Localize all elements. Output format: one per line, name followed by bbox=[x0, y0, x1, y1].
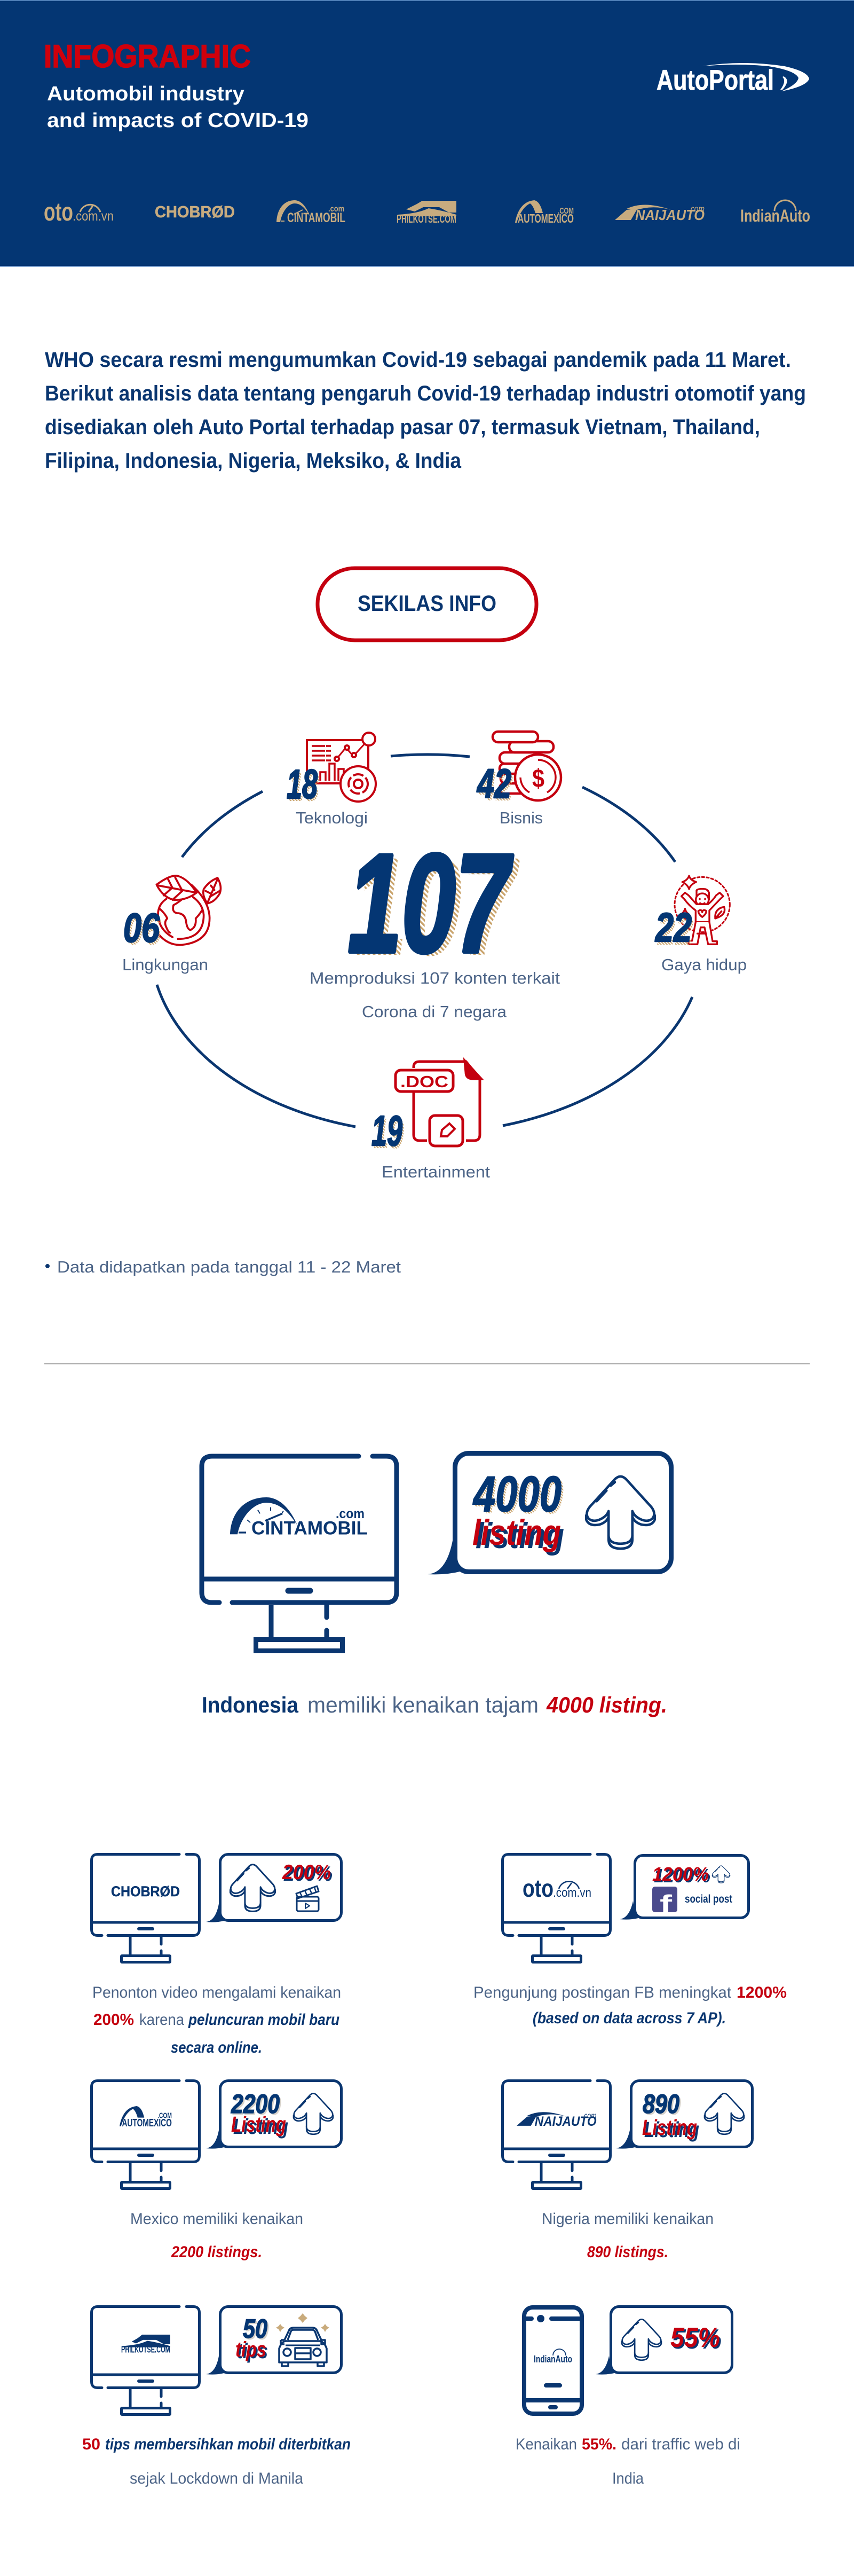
icon: phone bbox=[524, 2307, 582, 2414]
caption: Nigeria memiliki kenaikan bbox=[542, 2210, 714, 2228]
caption bbox=[542, 2210, 714, 2261]
speech bubble bbox=[206, 2080, 342, 2149]
panel: Philkotse tips bbox=[82, 2307, 351, 2487]
speech bubble bbox=[620, 1855, 748, 1920]
caption: 4000 listing. bbox=[546, 1692, 667, 1717]
stat: 50 tips: tips bbox=[235, 2338, 266, 2361]
caption: dari traffic web di bbox=[621, 2436, 740, 2453]
number: 22: 22 bbox=[657, 908, 693, 954]
caption: Kenaikan bbox=[516, 2436, 577, 2453]
panel: Chobrod video viewers bbox=[92, 1854, 342, 2056]
icon: small up arrow bbox=[712, 1866, 730, 1883]
caption: 2200 listings. bbox=[171, 2243, 262, 2261]
caption: Mexico memiliki kenaikan bbox=[130, 2210, 303, 2228]
logo: cintamobil bbox=[230, 1497, 368, 1539]
stat: 4000 listing: listing bbox=[476, 1515, 564, 1556]
icon: facebook: f bbox=[660, 1890, 673, 1918]
central figure: 107: 107 bbox=[353, 828, 521, 985]
caption: memiliki kenaikan tajam bbox=[307, 1692, 539, 1717]
stat: 50 tips: tips bbox=[237, 2339, 268, 2363]
logo: naijauto bbox=[517, 2111, 597, 2129]
header banner bbox=[0, 0, 854, 267]
logo: NAIJAUTO bbox=[615, 205, 705, 223]
stat: 1200%: 1200% bbox=[654, 1865, 710, 1887]
topic: Entertainment bbox=[371, 1061, 490, 1181]
subtitle: Automobil industry bbox=[47, 83, 244, 105]
caption bbox=[130, 2210, 303, 2261]
logo: naijauto: NAIJAUTO bbox=[535, 2114, 597, 2129]
icon: up arrow bbox=[294, 2093, 333, 2134]
caption: 1200% bbox=[737, 1984, 787, 2001]
icon: document: .DOC bbox=[400, 1072, 448, 1091]
stat: 1200%: 1200% bbox=[652, 1863, 709, 1885]
logo: oto.com.vn: .com.vn bbox=[73, 209, 114, 224]
speech bubble bbox=[616, 2080, 753, 2149]
logo: AUTOMEXICO: .COM bbox=[558, 207, 574, 216]
stat: 4000 listing: 4000 bbox=[472, 1466, 562, 1522]
label: Bisnis bbox=[500, 808, 543, 827]
topic: Bisnis bbox=[477, 732, 561, 827]
caption: Pengunjung postingan FB meningkat bbox=[473, 1984, 732, 2001]
stat: 50 tips: 50 bbox=[243, 2314, 267, 2344]
logo: philkotse bbox=[121, 2335, 170, 2355]
heading: INFOGRAPHIC: INFOGRAPHIC bbox=[44, 38, 251, 74]
button: SEKILAS INFO: SEKILAS INFO bbox=[358, 591, 496, 616]
caption bbox=[516, 2436, 740, 2487]
logo: cintamobil: CINTAMOBIL bbox=[251, 1518, 368, 1539]
logo: IndianAuto bbox=[740, 200, 810, 225]
stat: 890 Listing: 890 bbox=[643, 2089, 679, 2119]
topic: Teknologi bbox=[287, 733, 376, 827]
caption: peluncuran mobil baru bbox=[188, 2011, 339, 2029]
speech bubble bbox=[428, 1454, 671, 1574]
logo: AUTOMEXICO: AUTOMEXICO bbox=[518, 211, 574, 225]
logo: indianauto: IndianAuto bbox=[534, 2354, 572, 2365]
speech bubble bbox=[206, 1854, 342, 1922]
logo: cintamobil: .com bbox=[336, 1506, 365, 1521]
stat: 2200 Listing: 2200 bbox=[232, 2091, 281, 2121]
caption: 55%. bbox=[582, 2436, 616, 2453]
central caption: Corona di 7 negara bbox=[362, 1002, 507, 1021]
label: Teknologi bbox=[296, 808, 368, 827]
logo: AutoPortal: AutoPortal bbox=[657, 65, 774, 96]
logo: AUTOMEXICO bbox=[515, 200, 574, 225]
stat: 200%: 200% bbox=[283, 1863, 333, 1886]
intro text: WHO secara resmi mengumumkan Covid-19 sebagai pandemik pada 11 Maret. bbox=[45, 348, 791, 372]
topic: Teknologi: 18 bbox=[287, 761, 318, 807]
logo: oto.com.vn: oto bbox=[523, 1874, 553, 1902]
logo: NAIJAUTO: .com bbox=[689, 205, 705, 214]
stat: 890 Listing: Listing bbox=[644, 2117, 699, 2142]
topic: Bisnis: 42 bbox=[477, 761, 511, 807]
logo: automexico: AUTOMEXICO bbox=[122, 2117, 172, 2129]
stat: 4000 listing: 4000 bbox=[475, 1468, 564, 1524]
caption bbox=[82, 2436, 351, 2487]
icon: up arrow bbox=[705, 2093, 744, 2134]
logo: NAIJAUTO: NAIJAUTO bbox=[635, 207, 705, 223]
logo: oto.com.vn bbox=[523, 1874, 591, 1902]
stat: 890 Listing bbox=[642, 2089, 699, 2142]
logo: PHILKOTSE bbox=[397, 201, 456, 225]
stat: 200%: 200% bbox=[282, 1861, 331, 1884]
logo: CHOBROD: CHOBRØD bbox=[155, 202, 235, 221]
icon: document bbox=[396, 1061, 481, 1146]
caption bbox=[473, 1984, 787, 2027]
monitor bbox=[202, 1456, 397, 1651]
logo: automexico bbox=[120, 2106, 172, 2129]
monitor bbox=[503, 1854, 611, 1962]
caption: secara online. bbox=[171, 2039, 262, 2056]
stat: 55%: 55% bbox=[670, 2322, 720, 2353]
topic: Gaya hidup: 22 bbox=[654, 905, 692, 951]
monitor bbox=[92, 2307, 200, 2415]
stat: 890 Listing: Listing bbox=[642, 2115, 697, 2140]
speech bubble bbox=[206, 2307, 342, 2375]
monitor bbox=[503, 2080, 611, 2188]
icon: clapperboard bbox=[296, 1886, 319, 1911]
number: 06: 06 bbox=[125, 908, 162, 954]
logo: automexico: .COM bbox=[157, 2111, 172, 2121]
icon: up arrow bbox=[586, 1477, 655, 1549]
stat: 50 tips: 50 bbox=[244, 2315, 269, 2345]
icon: chart board bbox=[307, 733, 376, 802]
caption: tips membersihkan mobil diterbitkan bbox=[105, 2436, 351, 2453]
icon: facebook bbox=[652, 1887, 677, 1918]
panel: Indonesia hero bbox=[202, 1454, 671, 1717]
central caption bbox=[310, 969, 560, 1021]
stat: 2200 Listing: 2200 bbox=[231, 2089, 280, 2119]
number: 18: 18 bbox=[289, 764, 319, 810]
topic: Entertainment: 19 bbox=[371, 1107, 402, 1155]
caption: sejak Lockdown di Manila bbox=[130, 2470, 303, 2487]
logo: CINTAMOBIL: .com bbox=[328, 205, 344, 214]
icon: sparkles bbox=[276, 2313, 329, 2332]
topic: Lingkungan: 06 bbox=[123, 906, 160, 951]
panel: oto.com.vn Facebook visitors bbox=[473, 1854, 787, 2027]
stat: 2200 Listing: Listing bbox=[233, 2114, 288, 2139]
intro text bbox=[45, 348, 806, 473]
intro text: disediakan oleh Auto Portal terhadap pasar 07, termasuk Vietnam, Thailand, bbox=[45, 415, 760, 439]
monitor bbox=[92, 1854, 200, 1962]
caption: 200% bbox=[93, 2011, 134, 2029]
caption bbox=[202, 1692, 667, 1717]
caption: (based on data across 7 AP). bbox=[533, 2009, 726, 2027]
ellipse ring of arcs bbox=[157, 755, 692, 1127]
logo: chobrod: CHOBRØD bbox=[111, 1883, 180, 1899]
icon: globe with leaves bbox=[156, 876, 220, 945]
logo: oto.com.vn: .com.vn bbox=[553, 1886, 591, 1899]
icon: up arrow bbox=[622, 2319, 661, 2360]
number: 19: 19 bbox=[374, 1110, 404, 1157]
speech bubble bbox=[596, 2307, 732, 2375]
central figure: 107: 107 bbox=[348, 825, 515, 981]
logo: indianauto bbox=[534, 2349, 572, 2365]
logo: PHILKOTSE: PHILKOTSE.COM bbox=[397, 213, 456, 225]
stat: 2200 Listing bbox=[231, 2089, 288, 2139]
logo: IndianAuto: IndianAuto bbox=[740, 206, 810, 225]
stat: 4000 listing: listing bbox=[472, 1512, 561, 1553]
caption: India bbox=[612, 2470, 644, 2487]
button: SEKILAS INFO bbox=[318, 568, 536, 640]
caption: Penonton video mengalami kenaikan bbox=[92, 1984, 341, 2001]
number: 42: 42 bbox=[479, 764, 513, 810]
caption bbox=[92, 1984, 341, 2056]
logo: naijauto: .com bbox=[582, 2111, 597, 2121]
logo: CINTAMOBIL: CINTAMOBIL bbox=[287, 210, 345, 225]
footnote: Data didapatkan pada tanggal 11 - 22 Maret bbox=[57, 1258, 401, 1276]
icon: coins: $ bbox=[532, 765, 544, 793]
subtitle bbox=[47, 83, 309, 132]
central caption: Memproduksi 107 konten terkait bbox=[310, 969, 560, 987]
icon: up arrow bbox=[230, 1865, 275, 1911]
label: social post: social post bbox=[685, 1893, 732, 1905]
icon: coins bbox=[493, 732, 561, 800]
logo: oto.com.vn: oto bbox=[44, 198, 73, 226]
label: Entertainment bbox=[382, 1163, 490, 1181]
intro text: Filipina, Indonesia, Nigeria, Meksiko, & India bbox=[45, 449, 462, 473]
stat: 2200 Listing: Listing bbox=[231, 2112, 286, 2137]
logo: philkotse: PHILKOTSE.COM bbox=[121, 2344, 170, 2355]
stat: 55%: 55% bbox=[672, 2324, 722, 2355]
caption: 50 bbox=[82, 2436, 100, 2453]
panel: Naijauto listings bbox=[503, 2080, 753, 2261]
panel: IndianAuto web traffic bbox=[516, 2307, 740, 2487]
label: Gaya hidup bbox=[661, 955, 747, 974]
topic: Lingkungan bbox=[122, 876, 220, 974]
subtitle: and impacts of COVID-19 bbox=[47, 109, 309, 132]
stat: 4000 listing bbox=[472, 1466, 564, 1556]
stat: 890 Listing: 890 bbox=[644, 2091, 681, 2121]
topic: Gaya hidup bbox=[654, 876, 747, 974]
intro text: Berikut analisis data tentang pengaruh Covid-19 terhadap industri otomotif yang bbox=[45, 382, 806, 405]
caption: Indonesia bbox=[202, 1692, 299, 1717]
caption: 890 listings. bbox=[587, 2243, 668, 2261]
logo: CINTAMOBIL bbox=[276, 200, 345, 225]
icon: happy person bbox=[675, 876, 730, 944]
monitor bbox=[92, 2080, 200, 2188]
icon: clean car bbox=[279, 2328, 327, 2366]
stat: 50 tips bbox=[235, 2314, 269, 2363]
caption: karena bbox=[139, 2011, 184, 2029]
logo: oto.com.vn bbox=[44, 198, 114, 226]
label: Lingkungan bbox=[122, 955, 208, 974]
panel: Automexico listings bbox=[92, 2080, 342, 2261]
